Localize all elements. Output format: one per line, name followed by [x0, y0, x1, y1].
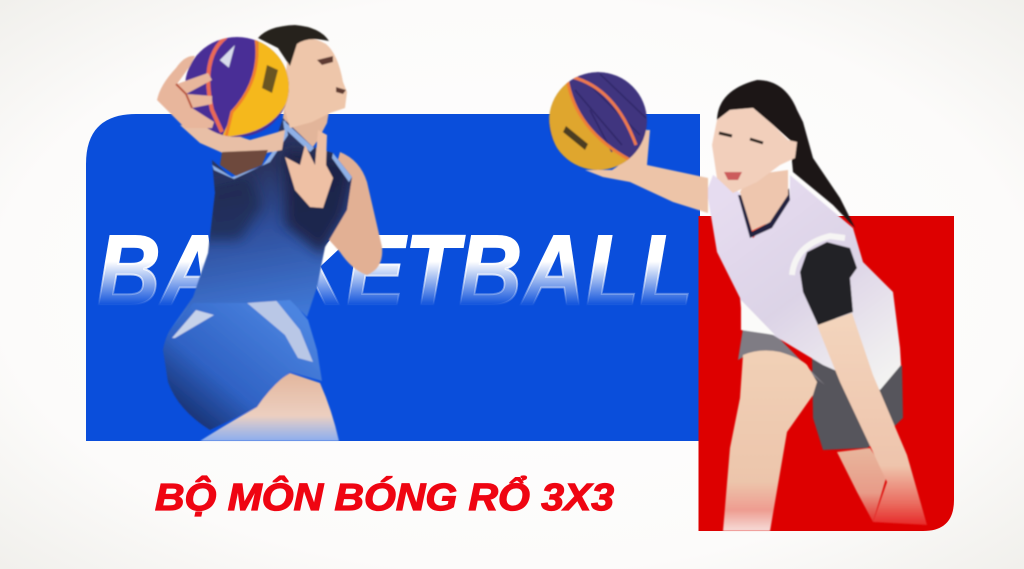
- male raised hand: [285, 130, 333, 208]
- female face: [712, 108, 797, 193]
- male leg: [200, 373, 339, 441]
- female extended arm: [585, 130, 708, 213]
- male player: [157, 25, 382, 441]
- female jersey: [708, 175, 901, 390]
- heading: BASKETBALL: BASKETBALL: [97, 215, 693, 327]
- female grey shorts: [738, 328, 825, 385]
- panel: red: [698, 216, 954, 531]
- panel: blue: [86, 114, 700, 441]
- female down arm: [817, 313, 927, 525]
- female sleeve: [800, 242, 857, 325]
- male right arm: [322, 152, 382, 275]
- female player: [549, 72, 927, 531]
- male ball: [184, 36, 292, 138]
- female back leg: [837, 448, 887, 522]
- male hand: [157, 56, 214, 128]
- female ball: [549, 72, 647, 171]
- male eye and mouth: [317, 56, 346, 94]
- title: BỘ MÔN BÓNG RỔ 3X3: [155, 474, 614, 519]
- male shorts: [163, 293, 322, 430]
- male upper arm: [180, 125, 285, 156]
- female hair: [717, 80, 855, 228]
- male face: [282, 38, 347, 128]
- female neck: [740, 170, 788, 231]
- female front leg: [723, 351, 817, 531]
- female eyes and mouth: [719, 133, 763, 143]
- male neck: [283, 100, 330, 147]
- female collar: [738, 188, 790, 238]
- male jersey: [170, 118, 355, 330]
- male hair: [258, 25, 329, 66]
- female dark shorts: [812, 355, 903, 450]
- male armpit shadow: [220, 150, 268, 176]
